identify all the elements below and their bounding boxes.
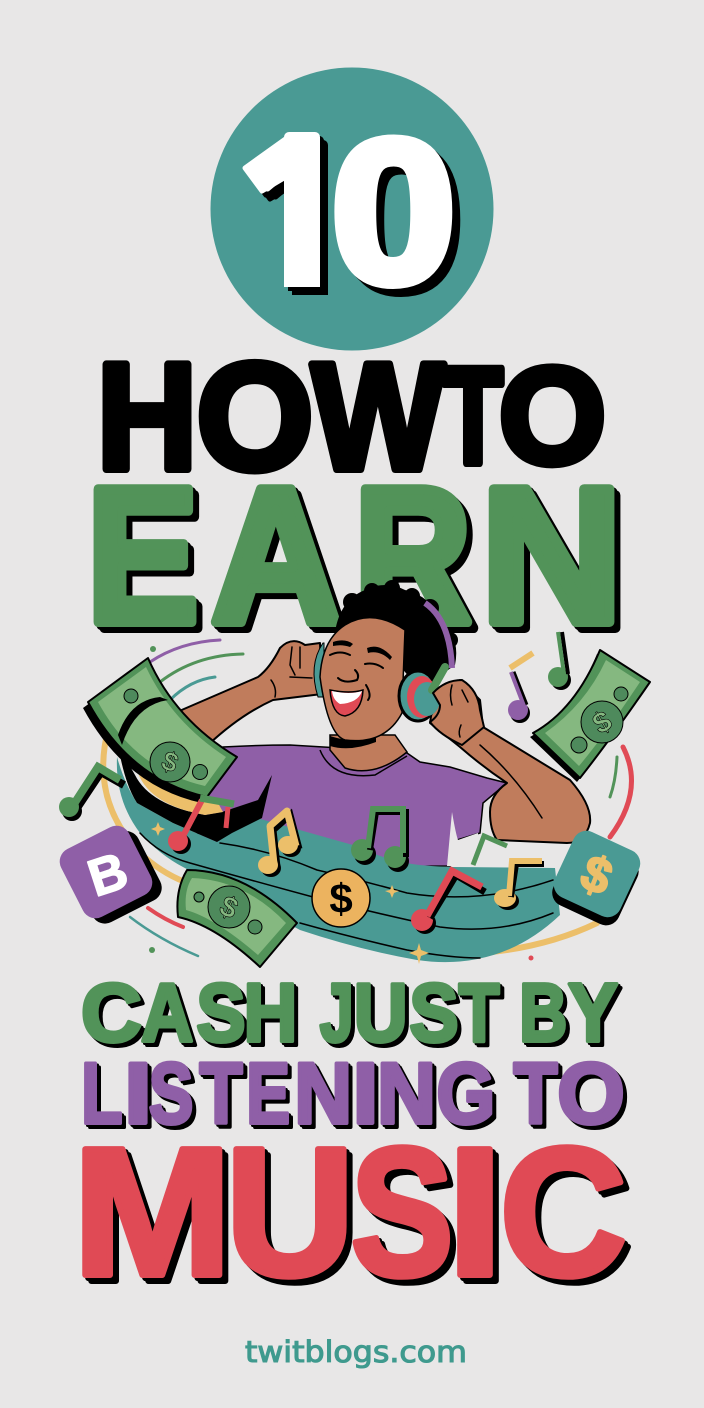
shirt shadow <box>118 745 272 842</box>
money: bottom left: $ <box>215 890 243 926</box>
heading: LISTENING TO: O <box>557 1046 625 1142</box>
heading: CASH JUST BY: S <box>409 966 459 1059</box>
staff lines <box>140 833 553 958</box>
money: left top: $ <box>157 745 183 779</box>
tile: purple B <box>55 821 167 928</box>
coin: $ <box>329 875 353 922</box>
right arm <box>430 680 590 843</box>
heading: HOWTO: W <box>312 332 445 502</box>
heading: LISTENING TO: T <box>200 1046 242 1142</box>
sparkles <box>151 822 429 964</box>
mouth <box>330 690 363 716</box>
heading: CASH JUST BY: Y <box>568 966 618 1059</box>
illustration: person listening to music with money <box>55 580 650 967</box>
right fist <box>430 680 484 745</box>
heading: CASH JUST BY: U <box>354 966 408 1059</box>
money: left top <box>83 658 237 803</box>
music notes <box>59 632 571 934</box>
tile: purple B: B <box>81 842 135 908</box>
money: right top <box>530 650 650 782</box>
money: bottom left <box>177 870 297 967</box>
heading: EARN: R <box>354 447 471 663</box>
coin <box>312 869 370 927</box>
heading: LISTENING TO: N <box>377 1046 436 1142</box>
heading: HOWTO <box>97 332 606 502</box>
heading: LISTENING TO: E <box>246 1046 290 1142</box>
heading: MUSIC: S <box>351 1109 454 1314</box>
heading: LISTENING TO: G <box>436 1046 495 1142</box>
heading: EARN: N <box>481 447 623 663</box>
heading: CASH JUST BY: C <box>81 966 142 1059</box>
left headphone cup <box>314 643 324 697</box>
heading: MUSIC: M <box>73 1109 232 1314</box>
heading: HOWTO: H <box>97 332 197 502</box>
footer: website: twitblogs.com <box>245 1335 467 1369</box>
heading: LISTENING TO: N <box>294 1046 352 1142</box>
tile: teal dollar: $ <box>573 844 620 906</box>
heading: CASH JUST BY: J <box>320 966 354 1059</box>
heading: HOWTO: T <box>443 340 503 493</box>
heading: MUSIC <box>73 1109 627 1314</box>
heading: EARN <box>87 447 623 663</box>
heading: CASH JUST BY: B <box>519 966 567 1059</box>
headband <box>425 603 452 668</box>
heading: MUSIC: U <box>226 1109 355 1314</box>
face details <box>330 640 392 716</box>
neck <box>330 735 407 771</box>
heading: CASH JUST BY <box>81 966 618 1059</box>
heading: MUSIC: I <box>447 1109 503 1314</box>
yellow crescent <box>138 773 223 815</box>
right headphone cup <box>399 667 445 721</box>
heading: LISTENING TO <box>81 1046 625 1142</box>
heading: CASH JUST BY: H <box>244 966 297 1059</box>
chin shadow <box>330 736 376 748</box>
heading: EARN: E <box>87 447 199 663</box>
left arm <box>177 641 322 745</box>
badge: number 10: 1 <box>257 98 342 326</box>
hair <box>335 580 458 690</box>
tile: teal dollar <box>548 826 645 930</box>
heading: LISTENING TO: T <box>514 1046 558 1142</box>
wave band <box>117 757 560 962</box>
heading: LISTENING TO: I <box>352 1046 378 1142</box>
face <box>320 618 405 741</box>
badge: number 10: 0 <box>331 98 456 326</box>
heading: LISTENING TO: L <box>81 1046 122 1142</box>
money: right top: $ <box>588 705 617 741</box>
heading: LISTENING TO: I <box>124 1046 152 1142</box>
shirt <box>190 745 507 868</box>
heading: EARN: A <box>211 447 341 663</box>
swooshes <box>103 640 631 956</box>
heading: MUSIC: C <box>500 1109 627 1314</box>
badge: number 10 <box>210 68 494 350</box>
heading: LISTENING TO: S <box>149 1046 193 1142</box>
heading: CASH JUST BY: T <box>459 966 499 1059</box>
heading: CASH JUST BY: A <box>141 966 193 1059</box>
heading: CASH JUST BY: S <box>196 966 246 1059</box>
heading: HOWTO: O <box>499 340 606 493</box>
heading: HOWTO: O <box>196 332 313 502</box>
